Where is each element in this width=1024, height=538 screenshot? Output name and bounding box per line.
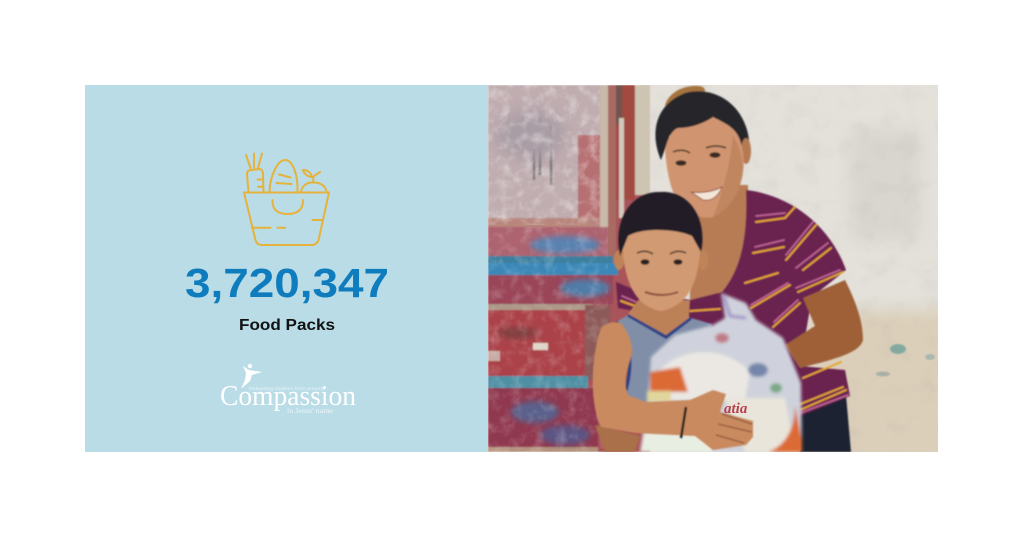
- door: [488, 85, 650, 452]
- photo: mother and son with food pack: [488, 85, 950, 470]
- ear: [741, 138, 751, 164]
- eyes and smile: [640, 259, 650, 265]
- boy's arm and hand: [593, 322, 753, 452]
- shirt: [616, 190, 850, 416]
- neck: [628, 300, 690, 335]
- food bag lettering: atia: [724, 401, 748, 417]
- shirt stripes: [621, 207, 848, 413]
- boy: [614, 192, 712, 420]
- face shadow: [713, 135, 743, 217]
- ears: [614, 250, 624, 270]
- logo: Compassion: in Jesus' name: [287, 407, 333, 415]
- hair: [655, 91, 749, 160]
- icon: leaping figure: [241, 364, 262, 389]
- icon: grocery basket: [244, 154, 329, 245]
- eyes and smile: [676, 160, 686, 166]
- food bag: [640, 293, 802, 452]
- logo: Compassion: Compassion: [220, 381, 356, 412]
- logo: Compassion: Releasing children from poverty: [249, 386, 326, 391]
- trousers: [798, 395, 851, 452]
- neck and chest: [690, 185, 748, 300]
- woman: [616, 86, 863, 452]
- tank top: [617, 315, 712, 402]
- hair: [618, 192, 703, 256]
- hair bun: [665, 86, 705, 106]
- arm: [785, 280, 863, 368]
- wall: [640, 85, 950, 470]
- statistic label: Food Packs: [239, 317, 335, 334]
- face: [665, 117, 744, 218]
- face: [622, 222, 700, 311]
- logo: Compassion: [220, 364, 356, 415]
- panel: statistic: [85, 85, 488, 452]
- statistic number: 3,720,347: [185, 260, 389, 306]
